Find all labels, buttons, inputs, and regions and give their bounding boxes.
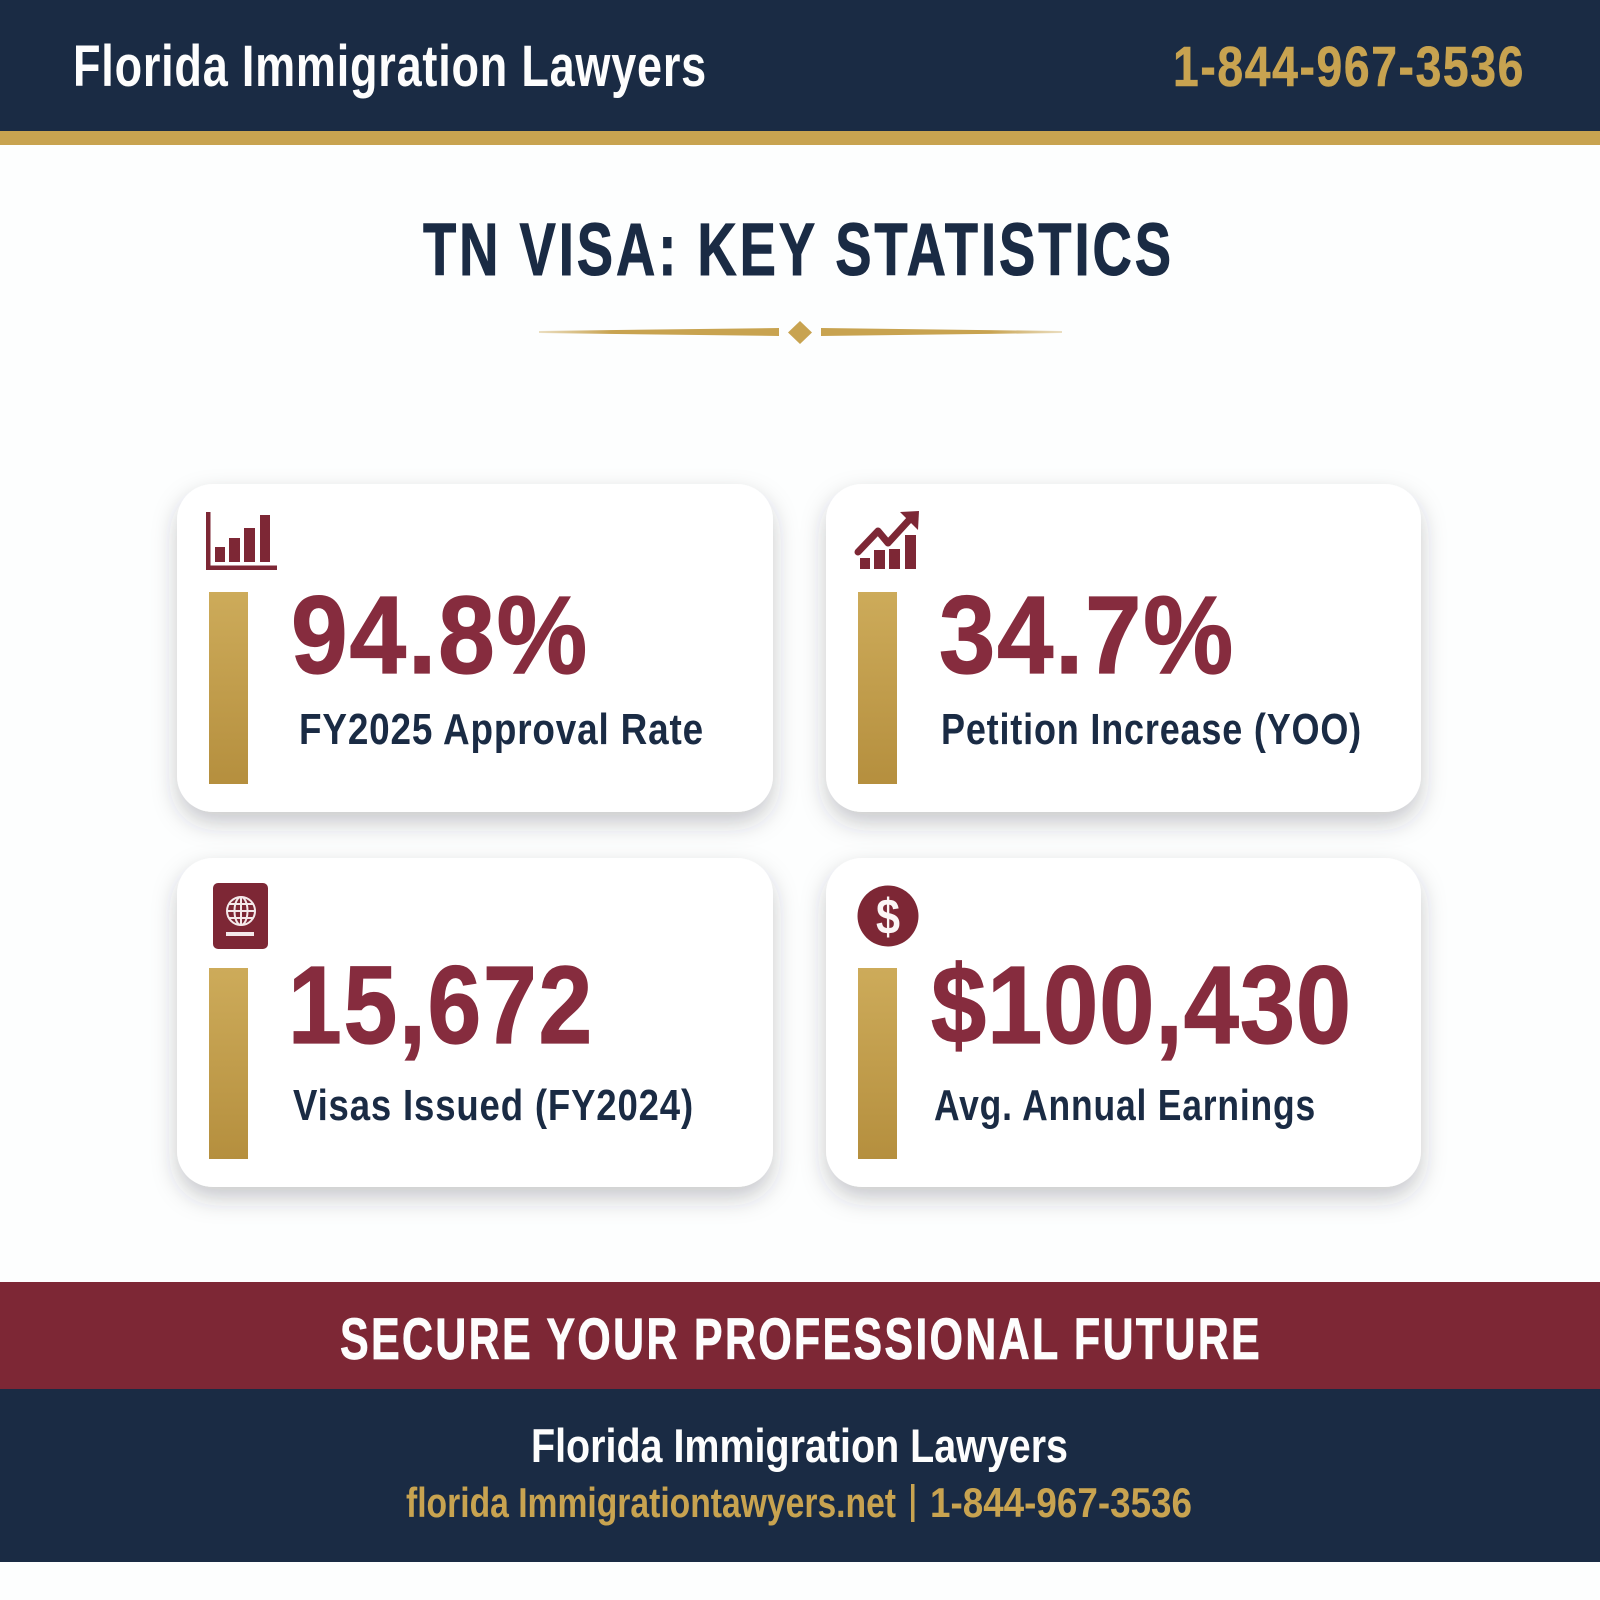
title: TN VISA: KEY STATISTICS bbox=[423, 208, 1174, 291]
footer contact: florida Immigrationtawyers.net bbox=[406, 1479, 896, 1526]
panel: annual earnings bbox=[826, 858, 1421, 1187]
accent bar bbox=[209, 592, 248, 784]
footer firm name: Florida Immigration Lawyers bbox=[531, 1419, 1068, 1472]
value: 94.8% bbox=[291, 574, 589, 697]
header bar bbox=[0, 0, 1600, 145]
icon: dollar coin bbox=[858, 886, 918, 946]
label: Avg. Annual Earnings bbox=[934, 1081, 1316, 1130]
panel: approval rate bbox=[177, 484, 773, 812]
label: FY2025 Approval Rate bbox=[299, 705, 704, 754]
icon: dollar coin: $ bbox=[876, 889, 900, 945]
icon: bar chart bbox=[206, 512, 277, 570]
title divider bbox=[539, 321, 1062, 344]
label: Petition Increase (YOO) bbox=[941, 705, 1362, 754]
icon: rising chart bbox=[858, 511, 919, 569]
value: $100,430 bbox=[931, 944, 1352, 1067]
accent bar bbox=[858, 968, 897, 1159]
value: 34.7% bbox=[939, 574, 1235, 697]
icon: passport bbox=[213, 883, 268, 949]
phone number: 1-844-967-3536 bbox=[1173, 35, 1525, 99]
panel: visas issued bbox=[177, 858, 773, 1187]
value: 15,672 bbox=[288, 944, 594, 1067]
call to action banner bbox=[0, 1282, 1600, 1389]
banner text: SECURE YOUR PROFESSIONAL FUTURE bbox=[340, 1307, 1262, 1372]
label: Visas Issued (FY2024) bbox=[293, 1081, 694, 1130]
panel: petition increase bbox=[826, 484, 1421, 812]
footer bbox=[0, 1389, 1600, 1562]
accent bar bbox=[209, 968, 248, 1159]
accent bar bbox=[858, 592, 897, 784]
firm name: Florida Immigration Lawyers bbox=[73, 34, 707, 99]
footer contact: 1-844-967-3536 bbox=[930, 1479, 1192, 1526]
